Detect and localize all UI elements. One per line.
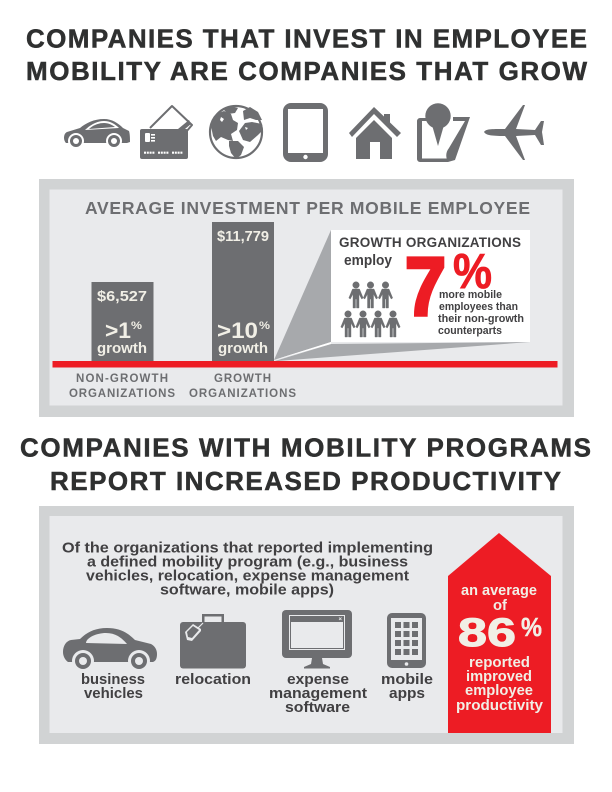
icon: house: [349, 107, 401, 159]
bar: growth organizations: growth: [218, 340, 268, 357]
icon: credit cards: [140, 106, 192, 159]
big number: 86%: %: [521, 612, 542, 642]
callout: red arrow 86%: reported: [469, 655, 530, 671]
text: intro: a defined mobility program (e.g., business: [87, 554, 408, 570]
icon: suitcase: [180, 614, 246, 668]
big number: 7%: [405, 240, 492, 333]
big number: 86%: 86: [458, 611, 516, 655]
label: expense management software: expense: [287, 671, 349, 688]
label: business vehicles: vehicles: [84, 685, 143, 702]
item: expense management software: [269, 610, 367, 716]
bar: non-growth organizations: growth: [97, 340, 147, 357]
label: expense management software: [269, 671, 367, 716]
baseline: red axis: [52, 361, 558, 368]
label: non-growth organizations: ORGANIZATIONS: [69, 388, 175, 400]
icon: map pin: [417, 103, 470, 162]
bar: growth organizations: [212, 222, 274, 361]
bar: growth organizations: $11,779: [217, 229, 269, 245]
title: companies that grow: MOBILITY ARE COMPANIES THAT GROW: [26, 56, 587, 86]
text: more mobile employees: [438, 289, 524, 337]
icon row: [64, 103, 544, 162]
label: relocation: relocation: [175, 671, 251, 688]
title: increased productivity: REPORT INCREASED PRODUCTIVITY: [50, 466, 561, 496]
bar: non-growth organizations: [92, 282, 154, 361]
label: growth organizations: ORGANIZATIONS: [189, 388, 296, 400]
icon: tablet: [283, 103, 328, 162]
text: intro: software, mobile apps): [160, 582, 334, 598]
label: business vehicles: business: [81, 671, 145, 688]
text: more mobile employees: their non-growth: [438, 313, 524, 325]
icon: car: [64, 119, 130, 149]
label: growth organizations: GROWTH: [214, 373, 271, 385]
label: growth organizations: [189, 373, 296, 400]
text: intro: vehicles, relocation, expense management: [86, 568, 409, 584]
item: relocation: [175, 614, 251, 688]
big number: 7%: %: [453, 245, 492, 299]
item: business vehicles: [63, 628, 157, 702]
label: non-growth organizations: [69, 373, 175, 400]
callout: red arrow 86%: productivity: [456, 698, 543, 714]
callout: red arrow 86%: improved: [466, 669, 532, 685]
title: increased productivity: COMPANIES WITH MOBILITY PROGRAMS: [20, 432, 591, 462]
text: intro: Of the organizations that reported implementing: [62, 540, 433, 556]
bar: growth organizations: %: [259, 320, 270, 332]
callout: growth organizations employ 7%: GROWTH ORGANIZATIONS: [339, 235, 521, 250]
item: mobile apps: [381, 613, 433, 702]
label: mobile apps: [381, 671, 433, 702]
text: more mobile employees: counterparts: [438, 325, 502, 337]
icon: airplane: [484, 105, 544, 160]
bar: non-growth organizations: $6,527: [97, 289, 147, 305]
icon: monitor: [282, 610, 352, 668]
icon: globe: [210, 106, 263, 159]
callout: red arrow 86%: [448, 533, 551, 733]
text: intro: [62, 540, 433, 598]
bar: non-growth organizations: >1: [105, 318, 131, 343]
callout: red arrow 86%: an average: [461, 583, 537, 599]
label: expense management software: software: [285, 699, 350, 716]
label: business vehicles: [81, 671, 145, 702]
callout: zoom wedge: [274, 230, 530, 361]
icon: tablet with apps: [387, 613, 426, 668]
bar: non-growth organizations: %: [131, 320, 142, 332]
callout: red arrow 86%: employee: [465, 683, 533, 699]
big number: 86%: [458, 611, 542, 655]
label: non-growth organizations: NON-GROWTH: [76, 373, 168, 385]
heading: average investment: AVERAGE INVESTMENT PER MOBILE EMPLOYEE: [85, 198, 530, 218]
title: companies that grow: [26, 24, 587, 86]
panel: average investment: [39, 179, 574, 417]
text: more mobile employees: more mobile: [439, 289, 502, 301]
panel: mobility programs: [39, 506, 574, 744]
bar: growth organizations: >10: [217, 318, 258, 343]
label: expense management software: management: [269, 685, 367, 702]
label: mobile apps: mobile: [381, 671, 433, 688]
callout: growth organizations employ 7%: [331, 230, 530, 342]
callout: growth organizations employ 7%: employ: [344, 253, 392, 269]
label: mobile apps: apps: [389, 685, 425, 702]
icon: people: [341, 282, 400, 337]
text: more mobile employees: employees than: [439, 301, 518, 313]
title: increased productivity: [20, 432, 591, 496]
callout: red arrow 86%: of: [493, 598, 507, 614]
big number: 7%: 7: [405, 240, 446, 333]
title: companies that grow: COMPANIES THAT INVEST IN EMPLOYEE: [26, 24, 587, 54]
icon: car: [63, 628, 157, 672]
